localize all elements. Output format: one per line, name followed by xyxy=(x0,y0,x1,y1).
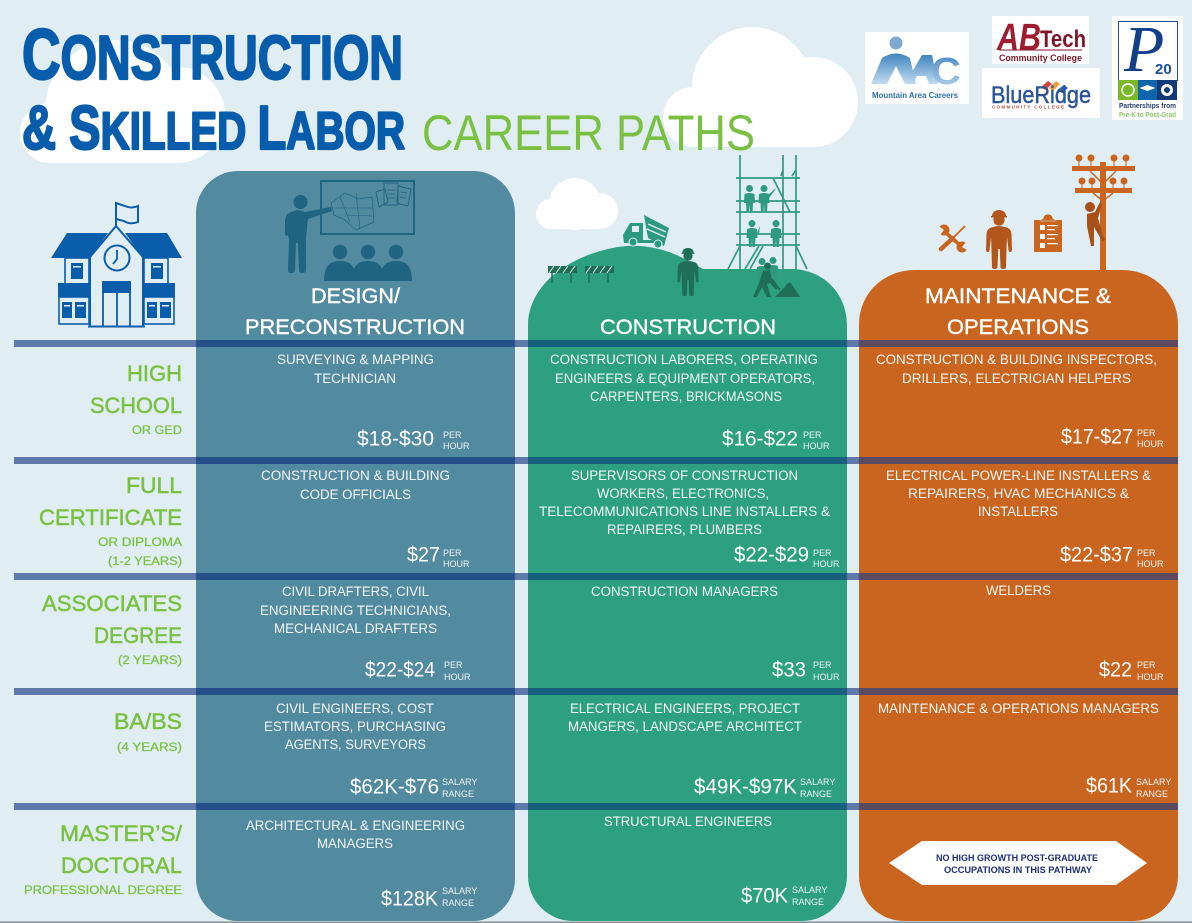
salary: bachelor's: SALARY xyxy=(442,777,477,787)
occupations: bachelor's: CIVIL ENGINEERS, COST xyxy=(276,701,434,716)
label: full certificate: (1-2 YEARS) xyxy=(108,556,182,568)
row divider bars xyxy=(14,340,1178,810)
heading: construction: CONSTRUCTION xyxy=(600,316,776,339)
occupations: certificate xyxy=(886,468,1151,519)
subtitle: career paths: CAREER PATHS xyxy=(422,105,755,161)
salary: bachelor's: $62K-$76 xyxy=(350,775,439,798)
occupations: bachelor's: ESTIMATORS, PURCHASING xyxy=(264,719,446,734)
icon: presenter with map and audience xyxy=(285,181,414,281)
occupations: certificate: CONSTRUCTION & BUILDING xyxy=(261,468,450,483)
salary: bachelor's: RANGE xyxy=(1136,789,1168,799)
wage: high school: HOUR xyxy=(1137,439,1164,449)
occupations: high school: ENGINEERS & EQUIPMENT OPERATORS, xyxy=(555,371,815,386)
occupations: bachelor's xyxy=(568,701,802,734)
audience xyxy=(324,245,412,281)
logo: P-20: Partnerships from xyxy=(1119,101,1176,110)
education level labels xyxy=(24,361,183,897)
occupations: associates: MECHANICAL DRAFTERS xyxy=(274,621,437,636)
salary: graduate xyxy=(381,886,477,910)
salary: bachelor's xyxy=(350,775,477,799)
label: master's/doctoral xyxy=(24,821,183,897)
heading: design/preconstruction xyxy=(245,285,465,339)
occupations: graduate: STRUCTURAL ENGINEERS xyxy=(604,814,772,829)
logo: P-20 xyxy=(1112,13,1183,120)
icon: maintenance worker xyxy=(986,210,1012,269)
occupations: certificate: TELECOMMUNICATIONS LINE INSTALLERS & xyxy=(539,504,830,519)
wage: high school: HOUR xyxy=(443,441,470,451)
logo: P-20: 20 xyxy=(1155,61,1172,78)
salary: graduate: RANGE xyxy=(792,897,824,907)
occupations: bachelor's: MAINTENANCE & OPERATIONS MANAGERS xyxy=(878,701,1159,716)
label: high school: OR GED xyxy=(132,425,182,437)
occupations: high school xyxy=(550,352,818,404)
wage: associates: PER xyxy=(444,660,463,670)
callout: no high growth occupations: NO HIGH GROWTH POST-GRADUATE xyxy=(936,853,1098,863)
wage: certificate: PER xyxy=(443,548,462,558)
wage: associates xyxy=(1099,658,1164,682)
panel: maintenance and operations column xyxy=(859,270,1178,921)
occupations: high school xyxy=(277,352,434,386)
board with map xyxy=(321,181,414,234)
label: master's/doctoral: PROFESSIONAL DEGREE xyxy=(24,885,182,897)
occupations: bachelor's: ELECTRICAL ENGINEERS, PROJECT xyxy=(570,701,800,716)
title xyxy=(22,16,405,163)
occupations: high school: SURVEYING & MAPPING xyxy=(277,352,434,367)
salary: bachelor's: RANGE xyxy=(442,789,474,799)
wage: high school: PER xyxy=(1137,428,1156,438)
wage: high school: HOUR xyxy=(803,441,830,451)
logo: Mountain Area Careers xyxy=(865,32,969,104)
occupations: associates: CIVIL DRAFTERS, CIVIL xyxy=(282,584,429,599)
wage: high school: PER xyxy=(803,430,822,440)
label: full certificate: OR DIPLOMA xyxy=(98,537,182,549)
occupations: bachelor's: AGENTS, SURVEYORS xyxy=(285,737,426,752)
icon: road barriers xyxy=(548,266,614,283)
wage: certificate: HOUR xyxy=(443,559,470,569)
salary: graduate: SALARY xyxy=(792,885,827,895)
salary: bachelor's xyxy=(1086,774,1171,799)
title: & SKILLED LABOR xyxy=(22,94,405,163)
title: CONSTRUCTION xyxy=(22,16,403,95)
wage: associates: $22-$24 xyxy=(365,658,435,681)
wage: associates: HOUR xyxy=(1137,672,1164,682)
wage: associates: PER xyxy=(813,660,832,670)
label: full certificate: FULL xyxy=(126,473,182,498)
wage: high school xyxy=(357,427,470,451)
logo: AB Tech: AB xyxy=(996,17,1041,59)
wage: certificate xyxy=(1060,543,1164,569)
icon: school building xyxy=(51,203,182,328)
salary: graduate: SALARY xyxy=(442,886,477,896)
salary: bachelor's: $49K-$97K xyxy=(694,775,797,798)
occupations: certificate xyxy=(261,468,450,502)
maintenance column content xyxy=(876,352,1171,885)
wage: associates: HOUR xyxy=(444,672,471,682)
wage: associates: HOUR xyxy=(813,672,840,682)
label: associates degree: (2 YEARS) xyxy=(118,655,182,667)
icon: worker digging xyxy=(753,262,800,297)
logo: AB Tech: Tech xyxy=(1040,26,1086,53)
logo: Blue Ridge: COMMUNITY COLLEGE xyxy=(992,104,1064,110)
heading: maintenance and operations xyxy=(925,285,1111,339)
icon: scaffold with workers xyxy=(728,155,807,285)
column headings xyxy=(245,285,1111,339)
wage: certificate: HOUR xyxy=(813,559,840,569)
callout: no high growth occupations xyxy=(889,841,1147,885)
label: associates degree: DEGREE xyxy=(94,623,182,648)
label: full certificate xyxy=(39,473,182,568)
callout: no high growth occupations: OCCUPATIONS IN THIS PATHWAY xyxy=(944,865,1092,875)
label: full certificate: CERTIFICATE xyxy=(39,505,182,530)
wage: certificate: HOUR xyxy=(1137,559,1164,569)
occupations: certificate: REPAIRERS, HVAC MECHANICS & xyxy=(908,486,1129,501)
label: high school xyxy=(90,361,182,437)
heading: maintenance and operations: MAINTENANCE & xyxy=(925,285,1111,308)
occupations: certificate: INSTALLERS xyxy=(978,504,1058,519)
occupations: certificate xyxy=(539,468,830,537)
presenter xyxy=(285,195,332,273)
heading: design/preconstruction: DESIGN/ xyxy=(311,285,400,308)
label: BA/BS: BA/BS xyxy=(114,709,182,734)
occupations: certificate: REPAIRERS, PLUMBERS xyxy=(607,522,762,537)
salary: graduate: RANGE xyxy=(442,898,474,908)
salary: bachelor's: SALARY xyxy=(800,777,835,787)
wage: certificate xyxy=(734,543,840,569)
salary: bachelor's: SALARY xyxy=(1136,777,1171,787)
label: BA/BS: (4 YEARS) xyxy=(117,742,182,754)
label: high school: SCHOOL xyxy=(90,393,182,418)
occupations: high school: DRILLERS, ELECTRICIAN HELPERS xyxy=(902,371,1131,386)
occupations: graduate xyxy=(246,818,465,851)
occupations: bachelor's xyxy=(264,701,446,752)
salary: graduate: $70K xyxy=(741,884,788,907)
wage: high school: $17-$27 xyxy=(1061,425,1133,448)
wage: associates xyxy=(772,658,840,682)
logo: AB Tech: Community College xyxy=(999,53,1082,64)
icon: utility pole with lineman xyxy=(1072,155,1135,270)
logo: AB Tech xyxy=(992,16,1089,64)
occupations: certificate: CODE OFFICIALS xyxy=(300,487,411,502)
heading: maintenance and operations: OPERATIONS xyxy=(947,316,1089,339)
label: associates degree xyxy=(42,591,182,667)
label: high school: HIGH xyxy=(127,361,182,386)
occupations: graduate: MANAGERS xyxy=(317,836,393,851)
label: associates degree: ASSOCIATES xyxy=(42,591,182,616)
wage: associates: $22 xyxy=(1099,658,1132,681)
wage: certificate: $22-$29 xyxy=(734,543,809,566)
wage: certificate: PER xyxy=(813,548,832,558)
logo: Mountain Area Careers: C xyxy=(931,51,961,93)
occupations: certificate: WORKERS, ELECTRONICS, xyxy=(597,486,769,501)
heading: design/preconstruction: PRECONSTRUCTION xyxy=(245,316,465,339)
salary: graduate xyxy=(741,884,827,907)
salary: graduate: $128K xyxy=(381,887,438,910)
occupations: graduate: ARCHITECTURAL & ENGINEERING xyxy=(246,818,465,833)
icon: crossed tools xyxy=(935,224,971,252)
salary: bachelor's: $61K xyxy=(1086,774,1132,797)
occupations: bachelor's: MANGERS, LANDSCAPE ARCHITECT xyxy=(568,719,802,734)
logo: Blue Ridge: BlueRidge xyxy=(991,82,1091,109)
panel: construction column xyxy=(528,246,847,921)
wage: certificate: $22-$37 xyxy=(1060,543,1133,566)
wage: certificate xyxy=(407,543,470,569)
occupations: high school xyxy=(876,352,1157,386)
occupations: high school: CARPENTERS, BRICKMASONS xyxy=(590,389,782,404)
wage: high school xyxy=(722,427,830,451)
wage: high school: $18-$30 xyxy=(357,427,434,450)
icon: worker in hard hat xyxy=(677,248,699,296)
logo: Mountain Area Careers: Mountain Area Careers xyxy=(872,90,958,100)
logo: P-20: P xyxy=(1123,13,1164,86)
occupations: high school: TECHNICIAN xyxy=(314,371,396,386)
occupations: certificate: SUPERVISORS OF CONSTRUCTION xyxy=(571,468,798,483)
occupations: associates xyxy=(260,584,451,636)
wage: certificate: $27 xyxy=(407,543,440,566)
occupations: associates: ENGINEERING TECHNICIANS, xyxy=(260,603,451,618)
occupations: associates: CONSTRUCTION MANAGERS xyxy=(591,584,778,599)
icon: dump truck xyxy=(623,215,669,248)
logo: P-20: Pre-K to Post-Grad xyxy=(1119,110,1176,119)
design column content xyxy=(246,352,477,910)
label: BA/BS xyxy=(114,709,182,754)
wage: certificate: PER xyxy=(1137,548,1156,558)
cloud: top centre xyxy=(663,27,858,147)
cloud: small xyxy=(536,178,618,230)
label: master's/doctoral: DOCTORAL xyxy=(61,853,182,878)
wage: high school: PER xyxy=(443,430,462,440)
construction column content xyxy=(539,352,840,907)
panel: design/preconstruction column xyxy=(196,171,515,921)
icon: clipboard checklist xyxy=(1034,214,1062,252)
logo: Blue Ridge xyxy=(982,68,1100,118)
cloud: behind title xyxy=(20,40,225,163)
wage: associates: PER xyxy=(1137,660,1156,670)
salary: bachelor's: RANGE xyxy=(800,789,832,799)
wage: associates: $33 xyxy=(772,658,806,681)
occupations: high school: CONSTRUCTION LABORERS, OPERATING xyxy=(550,352,818,367)
wage: high school: $16-$22 xyxy=(722,427,798,450)
occupations: associates: WELDERS xyxy=(986,583,1051,598)
label: master's/doctoral: MASTER’S/ xyxy=(60,821,183,846)
occupations: high school: CONSTRUCTION & BUILDING INSPECTORS, xyxy=(876,352,1157,367)
occupations: certificate: ELECTRICAL POWER-LINE INSTALLERS & xyxy=(886,468,1151,483)
